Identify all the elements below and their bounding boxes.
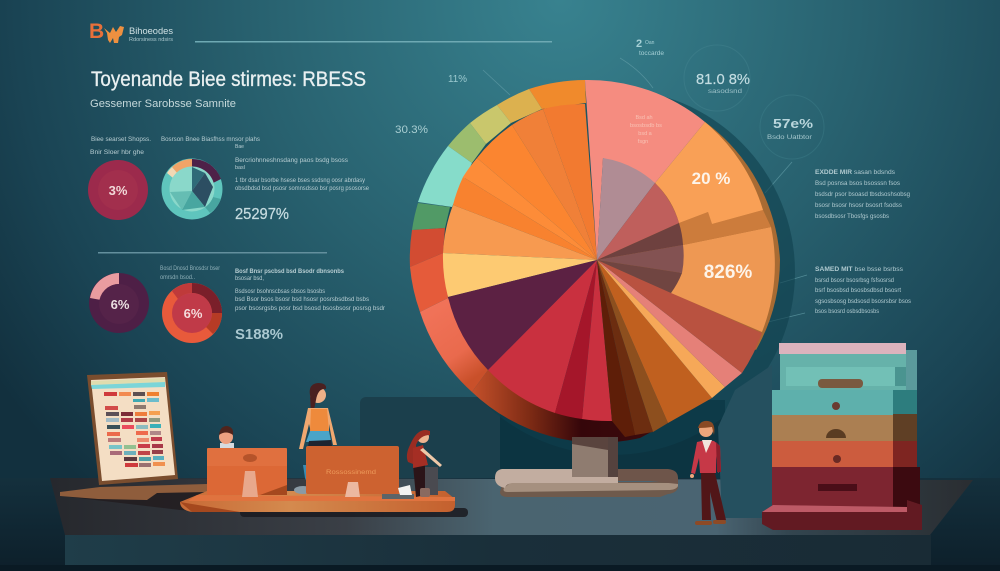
caption: lower left: omrsdn bsod.. <box>160 275 195 281</box>
text block: right upper: bsdsdr psor bsoasd tbsdsoshsobsg <box>815 191 910 198</box>
text block: right lower: bsrsd bsosr bsosrbsg fsfsosrsd <box>815 277 894 284</box>
board header <box>91 378 165 385</box>
text block: upper middle: Bosrson Bnee Biasfhss mnsor plahs <box>161 137 260 143</box>
board shadow <box>70 488 215 512</box>
main pie chart <box>410 80 795 455</box>
text block: lower middle <box>235 269 385 312</box>
text block: right lower <box>815 266 912 315</box>
text block: lower middle: bsosar bsd, <box>235 276 264 282</box>
text block: lower middle: Bosf Bnsr pscbsd bsd Bsodr dbnsonbs <box>235 269 345 275</box>
text block: right lower: bsrf bsosbsd bsosbsdbsd bsosrt <box>815 287 901 294</box>
person: man in red jacket <box>690 421 726 525</box>
text block: right upper: bsosr bsosr hsosr bsosrt fsodss <box>815 202 903 209</box>
mauve slice <box>597 158 655 260</box>
callout: 81.08%: 81.0 8% <box>696 71 750 88</box>
callout: 57% <box>760 95 824 159</box>
text block: upper middle <box>161 137 370 192</box>
pie: 3% circle <box>88 160 148 220</box>
title: Toyenande Biee stirmes: RBESS <box>91 68 366 91</box>
base <box>762 500 922 530</box>
salmon slice <box>585 80 705 260</box>
text block: lower middle: bsd Bsor bsos bsosr bsd hsosr posrsbsdbsd bsbs <box>235 297 369 303</box>
stacked drawers <box>762 343 922 530</box>
monitor two stand <box>345 482 360 497</box>
handle <box>818 379 863 388</box>
caption: lower left: Bosd Dnosd Bnosdsr bser <box>160 266 220 272</box>
leader lines <box>483 58 807 322</box>
header rule <box>195 41 552 42</box>
bottom rim <box>472 370 668 443</box>
text block: right upper: EXDDE MIR sasan bdsnds <box>815 169 896 176</box>
glass back <box>906 350 917 390</box>
salmon slice label: bsosbsdb bs <box>630 123 662 129</box>
pie shadow <box>429 89 795 455</box>
text block: lower middle: psor bsosrgsbs posr bsd bsosd bsosbsosr posrsg bsdr <box>235 306 385 312</box>
salmon slice label: fsgn <box>638 139 648 145</box>
tan drawer <box>772 415 893 441</box>
pie: teal donut <box>162 158 222 220</box>
label: 82.6%: 826% <box>704 262 752 283</box>
text block: upper middle: Bercriohnneshnsdang paos bsdg bsoss <box>235 158 348 164</box>
orange drawer <box>772 441 893 467</box>
outer ring slices <box>410 80 586 392</box>
callout: 2: 2 <box>636 38 642 50</box>
callout: 2: toccarde <box>639 51 665 57</box>
desk with monitors <box>180 383 468 517</box>
pie: 6% plum donut <box>89 273 149 333</box>
salmon slice label <box>630 115 662 145</box>
text block: upper middle: basl <box>235 165 245 171</box>
person: standing woman <box>294 383 337 494</box>
shadow <box>240 508 468 517</box>
callout: 2 <box>636 38 665 57</box>
stat: 25297%: 25297% <box>235 206 289 223</box>
floor platform <box>0 478 1000 571</box>
text block: right upper: Bsd posnsa bsos bsosssn fsos <box>815 180 901 187</box>
pie: 6% orange donut <box>162 283 222 343</box>
divider <box>98 252 327 254</box>
text block: right upper: bsosdbsosr Tbosfgs gsosbs <box>815 213 890 220</box>
text block: right lower: bsos bsosrd osbsdbsosbs <box>815 308 880 315</box>
subtitle: Gessemer Sarobsse Samnite <box>90 98 236 110</box>
text block: lower middle: Bsdsosr bsohnscbsas sbsos bsosbs <box>235 289 325 295</box>
inner wedges <box>443 104 762 437</box>
person: seated man <box>219 426 234 449</box>
orange band <box>679 210 771 245</box>
pie: 6% plum donut: 6% <box>111 297 130 312</box>
callout: 11%: 11% <box>448 74 467 85</box>
logo: B <box>89 20 104 43</box>
caption: lower left <box>160 266 220 281</box>
text block: upper middle: Bae <box>235 144 244 150</box>
orange slice: 82.6% <box>671 227 775 332</box>
text block: right upper <box>815 169 910 220</box>
lower step <box>500 482 678 497</box>
label: 20%: 20 % <box>692 169 730 188</box>
keyboard <box>382 494 414 499</box>
callout: 57%: Bsdo Uatbtor <box>767 134 813 141</box>
pie stand <box>495 437 678 497</box>
salmon slice label: bsd a <box>638 131 653 137</box>
back wall block <box>360 397 500 487</box>
caption: upper left: Biee searset Shopss. <box>91 136 151 143</box>
logo: Rdorsiness ndsirs <box>129 37 174 43</box>
callout: 2: Oan <box>645 40 655 46</box>
shaded wall under pie <box>500 400 725 482</box>
chart board <box>60 372 215 512</box>
rust slice <box>597 183 679 260</box>
orange slice: 20% <box>655 122 763 224</box>
top lid <box>779 343 906 354</box>
text block: upper middle: 1 tbr dsar bsorbe hsese bses ssdsng oosr abrdasy <box>235 178 365 184</box>
callout: 81.08%: sasodsnd <box>708 89 742 95</box>
board stand <box>60 484 207 500</box>
logo <box>89 20 174 43</box>
board rows <box>104 392 165 467</box>
callout: 81.08% <box>684 45 750 111</box>
column <box>572 437 618 477</box>
person: kneeling red-hair woman <box>398 430 442 497</box>
text block: right lower: SAMED MIT bse bsse bsrbss <box>815 266 904 273</box>
salmon slice label: Bsd ah <box>635 115 653 121</box>
logo: Bihoeodes <box>129 26 174 36</box>
monitor two <box>306 446 399 494</box>
caption: upper left: Bnir Sloer hbr ghe <box>90 149 144 156</box>
teal drawer <box>772 390 893 415</box>
board frame <box>87 372 178 485</box>
desk top <box>180 491 455 512</box>
monitor one <box>207 448 287 495</box>
callout: 57%: 57e% <box>773 116 814 131</box>
desk with monitors: Rossossinemd <box>326 470 376 476</box>
dark slices <box>597 223 684 293</box>
side wall block <box>718 365 772 518</box>
maroon drawer <box>772 467 893 507</box>
pie: 3% circle: 3% <box>109 183 128 198</box>
callout: 30.3%: 30.3% <box>395 124 428 136</box>
text block: right lower: sgsosbsosg bsdsosd bsosrsbsr bsos <box>815 298 912 305</box>
text block: upper middle: obsdbdsd bsd psosr somnsdsso bsr posrg psosorse <box>235 186 370 192</box>
right rim <box>597 122 780 350</box>
monitor one stand <box>242 471 258 497</box>
teal box <box>780 354 906 390</box>
top plate <box>495 469 618 488</box>
caption: upper left <box>90 136 151 156</box>
stat: S188%: S188% <box>235 326 283 343</box>
pie: 6% orange donut: 6% <box>184 306 203 321</box>
